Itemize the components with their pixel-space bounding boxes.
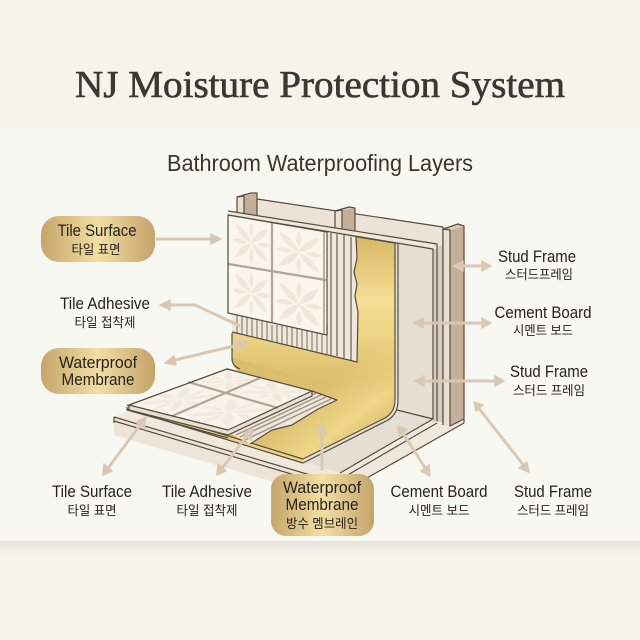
label: tile surface bottom: Tile Surface <box>52 482 132 501</box>
arrow: stud frame lower <box>474 402 529 472</box>
label: tile surface bottom: 타일 표면 <box>68 503 116 518</box>
label pill: waterproof membrane <box>41 348 155 394</box>
floor tile pattern: front <box>177 396 283 429</box>
label: stud frame bottom <box>514 482 592 518</box>
floor slab <box>114 372 464 505</box>
label: stud frame upper: Stud Frame <box>498 247 576 266</box>
arrow: tile adhesive floor <box>217 428 253 475</box>
label: cement board right: Cement Board <box>494 303 592 322</box>
label: stud frame upper <box>498 247 576 282</box>
tile pattern: upper right <box>276 227 322 277</box>
cutaway wall and floor illustration <box>114 193 464 505</box>
arrow: membrane floor <box>317 424 327 470</box>
arrow: stud frame middle <box>415 376 504 386</box>
label: stud frame middle: 스터드 프레임 <box>513 383 585 398</box>
label: stud frame middle <box>510 362 588 398</box>
tile pattern: lower right <box>276 277 322 331</box>
cement board floor <box>300 410 437 476</box>
floor tile pattern: right <box>231 379 319 405</box>
label: tile adhesive bottom <box>162 482 252 518</box>
label: cement board bottom: 시멘트 보드 <box>408 503 470 518</box>
label: cement board right <box>494 303 592 338</box>
subtitle: Bathroom Waterproofing Layers <box>167 150 473 176</box>
stud frame back plate <box>257 199 443 410</box>
label: tile adhesive bottom: Tile Adhesive <box>162 482 252 501</box>
label: stud frame upper: 스터드프레임 <box>505 267 573 282</box>
wall tile adhesive <box>232 232 358 362</box>
cement board wall <box>228 211 443 425</box>
label: cement board bottom <box>390 482 488 518</box>
arrow: tile surface floor <box>103 417 146 475</box>
floor tile pattern: left <box>133 385 227 414</box>
label pill: tile surface: Tile Surface <box>58 221 136 240</box>
label: stud frame bottom: Stud Frame <box>514 482 592 501</box>
label: tile adhesive: Tile Adhesive <box>60 294 150 313</box>
label pill: waterproof membrane bottom <box>271 474 374 536</box>
panel: diagram background <box>0 128 640 541</box>
waterproof membrane <box>127 232 398 463</box>
right stud post <box>443 224 464 426</box>
arrow: tile adhesive <box>160 300 240 326</box>
stud frame middle post <box>335 207 355 232</box>
label: stud frame bottom: 스터드 프레임 <box>517 503 589 518</box>
label pill: tile surface <box>41 216 155 262</box>
panel shadow <box>0 541 640 555</box>
wall tiles <box>228 215 327 335</box>
label: tile surface bottom <box>52 482 132 518</box>
tile pattern: lower left <box>233 269 270 318</box>
label pill: waterproof membrane bottom: Membrane <box>286 495 358 514</box>
title: NJ Moisture Protection System <box>75 64 565 106</box>
arrow: cement board floor <box>398 425 430 476</box>
floor tiles <box>127 369 319 438</box>
arrow: stud frame upper <box>454 261 491 271</box>
tile pattern: upper left <box>233 219 270 267</box>
label pill: waterproof membrane: Membrane <box>62 370 134 389</box>
stud frame left post <box>237 193 257 216</box>
label pill: waterproof membrane bottom: 방수 멤브레인 <box>286 516 358 531</box>
label: tile adhesive: 타일 접착제 <box>74 315 136 330</box>
label pill: tile surface: 타일 표면 <box>72 242 120 257</box>
label: tile adhesive <box>60 294 150 330</box>
arrow: tile surface <box>156 234 221 244</box>
floor tile pattern: back <box>191 370 266 393</box>
arrow: waterproof membrane <box>165 340 248 365</box>
label: stud frame middle: Stud Frame <box>510 362 588 381</box>
label: cement board right: 시멘트 보드 <box>513 323 573 338</box>
label pill: waterproof membrane bottom: Waterproof <box>283 478 361 497</box>
gap behind cement board <box>433 246 443 422</box>
label: tile adhesive bottom: 타일 접착제 <box>176 503 238 518</box>
label: cement board bottom: Cement Board <box>390 482 488 501</box>
arrow: cement board <box>414 318 491 328</box>
label pill: waterproof membrane: Waterproof <box>59 353 137 372</box>
floor tile adhesive <box>228 391 337 444</box>
